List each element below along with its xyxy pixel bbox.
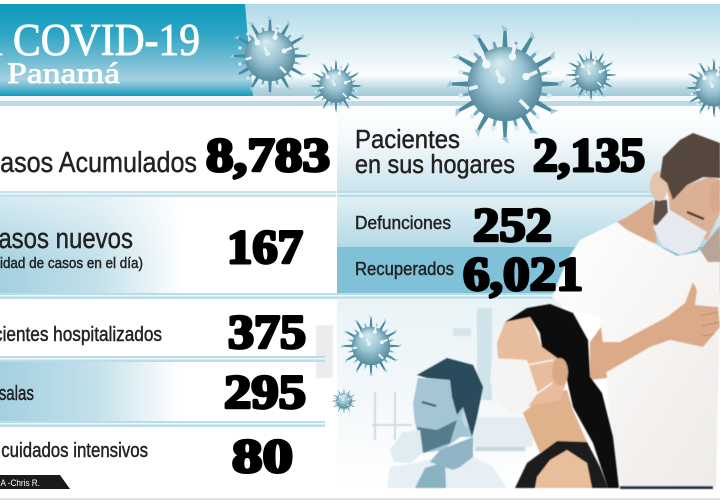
number: pacientes en hogares: 2,135 — [533, 129, 645, 182]
number: casos acumulados: 8,783 — [206, 129, 330, 182]
panel: pacientes en sus hogares — [337, 107, 720, 191]
number: casos nuevos: 167 — [227, 221, 303, 274]
hair — [417, 358, 483, 437]
number: defunciones: 252 — [473, 199, 552, 252]
shirt — [552, 222, 720, 487]
hair — [660, 133, 720, 200]
photo: coughing man — [387, 358, 507, 488]
ear — [462, 407, 474, 427]
hand — [390, 430, 423, 463]
black top — [515, 441, 608, 488]
header band — [0, 4, 720, 96]
mask — [490, 358, 538, 413]
eye — [422, 402, 436, 406]
text: defunciones: Defunciones — [355, 213, 451, 233]
eye — [687, 212, 704, 219]
icon: virus 4 — [565, 49, 617, 101]
number: recuperados: 6,021 — [463, 248, 583, 301]
hair and ponytail — [505, 304, 619, 488]
panel: en salas — [0, 362, 325, 421]
number: salas: 295 — [224, 366, 306, 419]
text: recuperados: Recuperados — [355, 259, 454, 279]
face — [667, 177, 720, 240]
icon: virus 6 — [340, 315, 402, 377]
photo: woman with mask — [490, 304, 619, 488]
face — [497, 315, 570, 410]
text: pacientes en sus hogares: en sus hogares — [355, 149, 515, 179]
panel: defunciones — [337, 197, 720, 247]
forearm on forehead — [708, 180, 720, 213]
photo: standing man with mask — [552, 133, 720, 489]
panel: title — [0, 4, 253, 96]
number: cuidados intensivos: 80 — [232, 430, 293, 483]
panel: casos nuevos — [0, 197, 336, 293]
credit — [0, 475, 70, 489]
shoulder — [535, 450, 592, 488]
ear — [552, 358, 568, 386]
icon: virus 3 large — [445, 24, 565, 144]
panel: recuperados — [337, 247, 720, 294]
upper arm — [568, 310, 607, 380]
text: pacientes en sus hogares — [355, 124, 515, 179]
panel: title: Panamá — [7, 57, 120, 90]
forearm and hand — [590, 282, 720, 380]
shoulder shadow — [700, 226, 720, 262]
text: casos nuevos — [0, 223, 143, 272]
face — [413, 378, 477, 453]
ear — [650, 171, 668, 201]
icon: virus 1 — [230, 16, 310, 96]
mask — [653, 210, 707, 255]
panel: title: COVID-19 — [13, 15, 200, 65]
number: hospitalizados: 375 — [228, 306, 306, 359]
neck — [523, 390, 587, 453]
body — [387, 450, 507, 488]
text: pacientes en sus hogares: Pacientes — [355, 124, 460, 154]
neck — [430, 437, 473, 470]
icon: virus 7 — [332, 389, 356, 413]
beard — [653, 200, 668, 227]
icon: virus 5 — [684, 58, 720, 118]
neck — [617, 200, 657, 243]
beard — [417, 420, 457, 453]
hospital background — [316, 299, 562, 488]
jeans — [620, 486, 713, 489]
icon: virus 2 — [309, 59, 363, 113]
